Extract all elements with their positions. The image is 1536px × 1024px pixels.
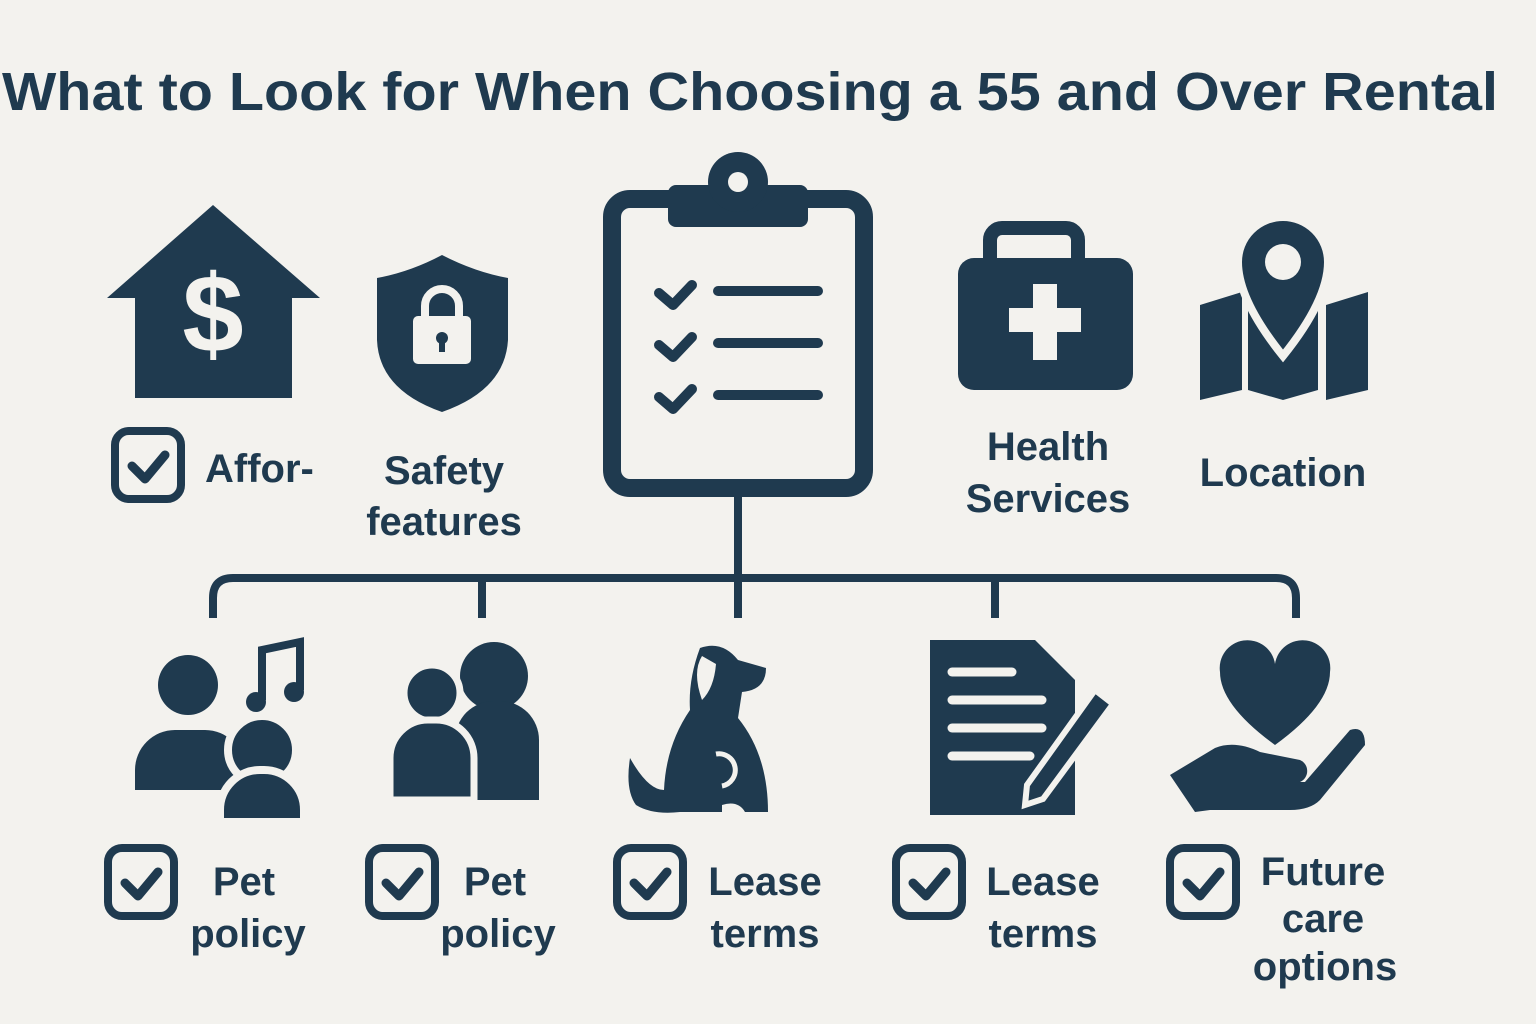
label: lease terms 1: Lease (708, 860, 822, 904)
label: pet policy 1: policy (190, 912, 307, 956)
icon: shield with lock (377, 255, 508, 412)
label: future care options: care (1282, 897, 1364, 941)
label: location: Location (1200, 451, 1366, 495)
label: affordability: Affor- (205, 447, 314, 491)
icon: dog (628, 646, 768, 813)
label: pet policy 1: Pet (213, 860, 275, 904)
icon: medical case (958, 228, 1133, 390)
label: pet policy 2: Pet (464, 860, 526, 904)
checkbox 1 (108, 848, 174, 916)
label: lease terms 1: terms (711, 912, 819, 956)
label: pet policy 2: policy (440, 912, 557, 956)
checkbox 4 (896, 848, 962, 916)
label: future care options: options (1253, 945, 1397, 989)
icon: house with dollar: $ (182, 253, 244, 376)
icon: heart in hand (1170, 640, 1365, 812)
checkbox 2 (369, 848, 435, 916)
icon: map with pin (1200, 217, 1368, 400)
checkbox: affordability (115, 431, 181, 499)
title: What to Look for When Choosing a 55 and Over Rental (2, 62, 1498, 122)
label: future care options: Future (1261, 850, 1385, 894)
icon: clipboard (612, 152, 864, 488)
icon: people with music (135, 642, 304, 822)
icon: two people (390, 642, 539, 800)
label: health services: Health (987, 425, 1109, 469)
icon: house with dollar (107, 205, 320, 398)
connector tree (213, 497, 1296, 618)
checkbox 5 (1170, 848, 1236, 916)
label: safety features: features (366, 500, 522, 544)
label: lease terms 2: Lease (986, 860, 1100, 904)
label: lease terms 2: terms (989, 912, 1097, 956)
label: safety features: Safety (384, 449, 505, 493)
checkbox 3 (617, 848, 683, 916)
icon: document with pen (930, 640, 1113, 815)
label: health services: Services (966, 477, 1130, 521)
